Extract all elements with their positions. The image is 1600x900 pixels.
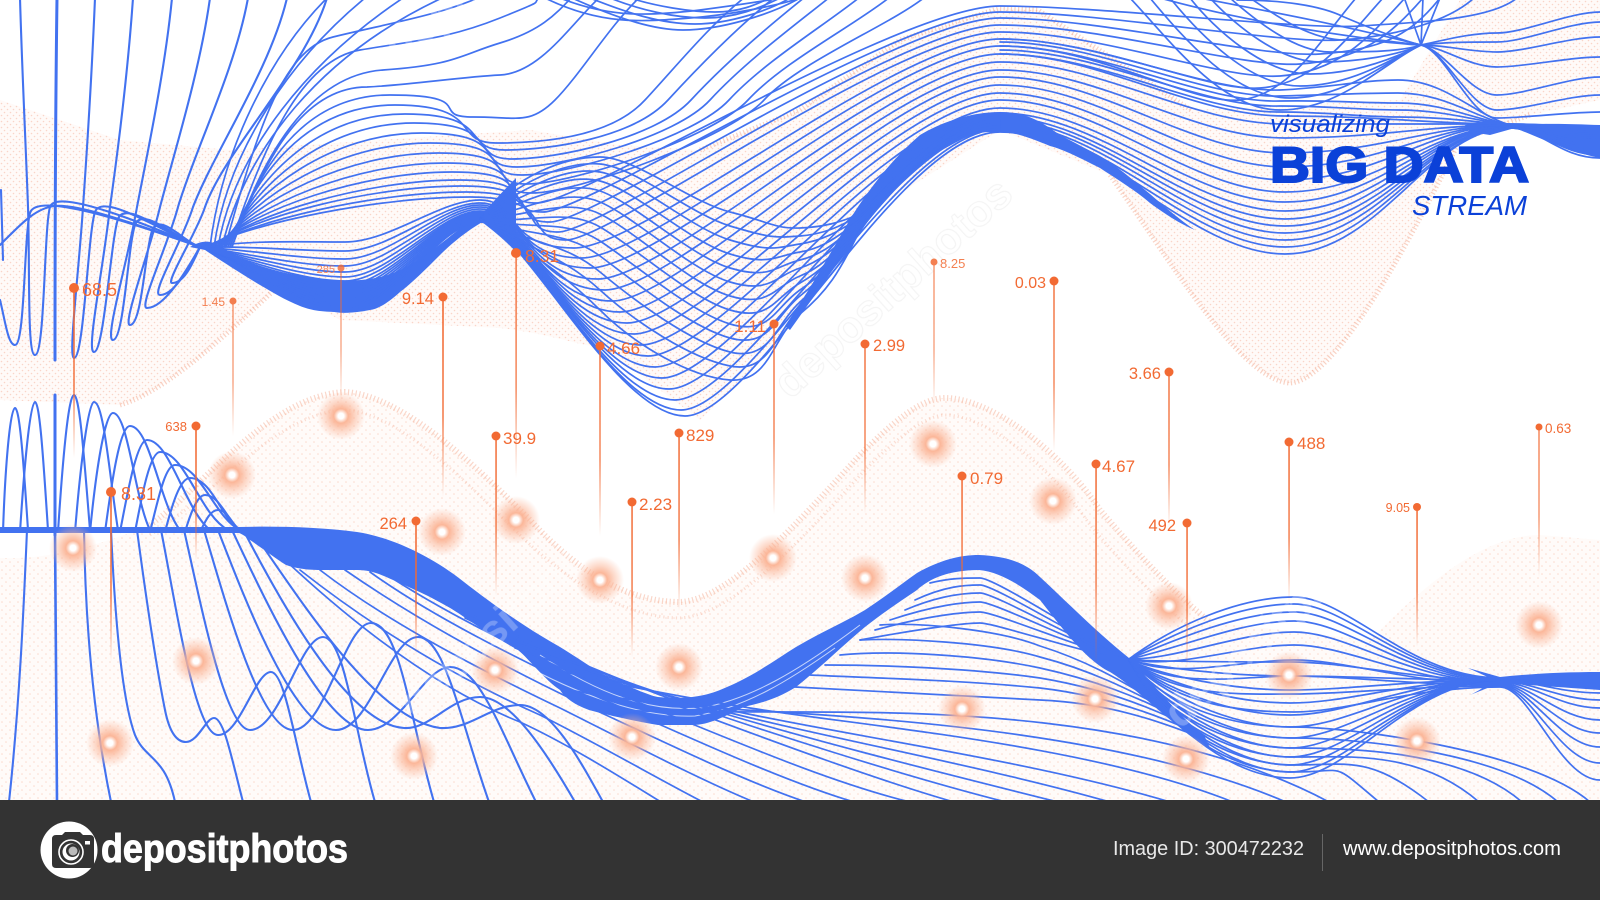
pin: 68.5: 68.5: [82, 280, 117, 300]
pin: 264: 264: [379, 515, 407, 533]
watermarks: [376, 0, 1412, 737]
bottom stream: fan of falling lines: [285, 560, 1329, 802]
top stream: small spindle at top edge: [545, 0, 800, 30]
pin: 68.5: [69, 280, 117, 458]
pin: 488: 488: [1297, 434, 1325, 453]
pin: 8.31 lower: 8.31: [121, 484, 156, 504]
pin: 4.66: [596, 339, 640, 536]
website: www.depositphotos.com: [1342, 838, 1561, 860]
pin: 285: 285: [317, 264, 335, 276]
bottom stream: left spindle loops: [3, 395, 240, 535]
pin: 39.9: 39.9: [503, 429, 536, 448]
logo wordmark: depositphotos: [101, 827, 348, 871]
pin: 492: [1148, 517, 1192, 668]
bottom stream: right band: [1468, 668, 1600, 695]
pin: 0.79: [958, 469, 1003, 616]
pin: 39.9: [492, 429, 536, 596]
pin: 285: [317, 264, 344, 403]
title: STREAM: STREAM: [1412, 190, 1528, 221]
watermarks: depositphotos: [764, 168, 1022, 407]
top stream: rising lines: [200, 0, 1600, 416]
top stream: solid ribbons: [190, 112, 1600, 330]
pin: 492: 492: [1148, 517, 1176, 535]
pin: 0.63: [1536, 421, 1571, 577]
pin: 0.63: 0.63: [1545, 421, 1571, 436]
image id: Image ID: 300472232: [1113, 838, 1304, 860]
pin: 4.66: 4.66: [607, 339, 640, 358]
top stream: left spindle loops: [0, 0, 327, 360]
title: visualizing: visualizing: [1270, 111, 1391, 138]
pin: 8.25: 8.25: [940, 256, 965, 271]
pin: 1.45: 1.45: [202, 295, 225, 309]
footer bar: [0, 800, 1600, 900]
pin: 1.11: [734, 317, 778, 514]
pin: 3.66: [1129, 365, 1174, 527]
bottom stream: main solid ribbon: [0, 527, 1210, 748]
glowing data points: [49, 392, 1563, 783]
pin: 3.66: 3.66: [1129, 365, 1161, 383]
pin: 0.03: [1015, 275, 1058, 451]
pin: 8.31 upper: 8.31: [525, 246, 559, 266]
pin: 638: [165, 419, 200, 561]
pin: 9.05: 9.05: [1386, 501, 1410, 515]
bottom stream: descending wave lines: [9, 530, 603, 802]
pin: 829: 829: [686, 426, 714, 445]
pin: 8.31 lower: [106, 484, 156, 662]
pin: 638: 638: [165, 419, 187, 434]
pin: 264: [379, 515, 420, 656]
bottom stream: right spindle dipping lines: [1129, 660, 1500, 778]
pin: 8.31 upper: [511, 246, 559, 478]
pin: 2.23: [628, 495, 672, 657]
pin: 488: [1284, 434, 1325, 602]
title: BIG DATA: BIG DATA: [1270, 137, 1529, 193]
pin: 2.99: [860, 337, 905, 514]
pin: 1.11: 1.11: [734, 317, 766, 336]
bottom stream: white slits in ribbon: [530, 625, 860, 716]
pin: 9.14: [402, 290, 448, 497]
title block: [1270, 111, 1529, 221]
top stream: falling lines across the spindle: [480, 114, 1000, 380]
dotted wave: lower stream: [0, 392, 1600, 800]
pin: 4.67: [1092, 457, 1135, 664]
pin: 0.79: 0.79: [970, 469, 1003, 488]
bottom stream: right spindle falling lines: [1129, 597, 1600, 802]
icon: camera logo: [40, 822, 98, 878]
pin: 2.23: 2.23: [639, 495, 672, 514]
pin: 9.14: 9.14: [402, 290, 434, 308]
pin: 8.25: [930, 256, 965, 407]
pin: 1.45: [202, 295, 236, 436]
pin: 4.67: 4.67: [1102, 457, 1135, 476]
dotted wave: upper stream: [0, 0, 1600, 420]
pin: 829: [674, 426, 714, 611]
pin: 0.03: 0.03: [1015, 275, 1046, 292]
pin: 9.05: [1386, 501, 1421, 647]
top stream: right spindle and fan: [1000, 0, 1600, 125]
watermarks: depositphotos: [389, 488, 647, 727]
watermarks: depositphotos: [1154, 498, 1412, 737]
pin: 2.99: 2.99: [873, 337, 905, 355]
